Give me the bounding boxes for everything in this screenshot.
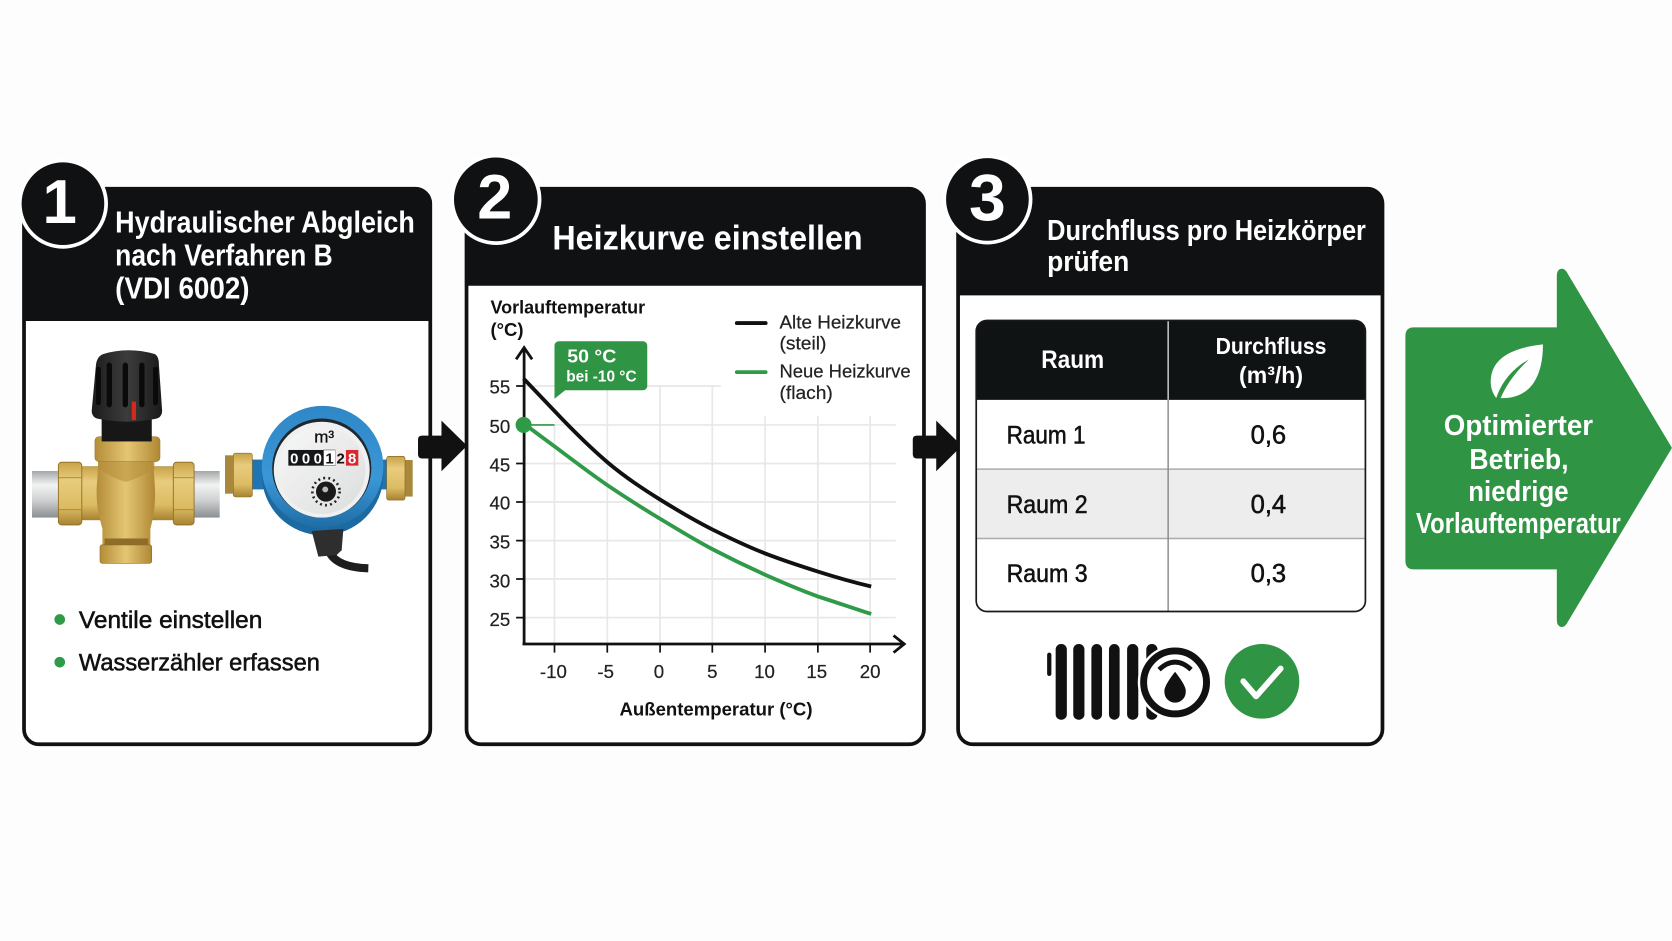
callout: 50 °C bei -10 °C xyxy=(554,341,647,399)
table: Durchfluss pro Raum: Raum xyxy=(1041,347,1104,374)
number badge 1: 1 xyxy=(43,168,77,237)
green arrow shape xyxy=(1405,269,1672,627)
chart legend: Neue Heizkurve xyxy=(779,360,911,381)
table: Durchfluss pro Raum: 0,3 xyxy=(1251,560,1286,588)
chart legend: (steil) xyxy=(779,333,826,354)
illustration: water meter: 0 xyxy=(314,450,322,467)
panel 1 heading: Hydraulischer Abgleich xyxy=(115,204,415,239)
illustration: water meter: m³ xyxy=(314,428,334,447)
panel 3 header bar xyxy=(956,189,1384,295)
illustration: water meter: 1 xyxy=(325,450,334,467)
illustration: water meter: 0 xyxy=(302,450,310,467)
table: Durchfluss pro Raum: Raum 1 xyxy=(1007,423,1086,450)
arrow: step 1 to 2 xyxy=(418,421,467,471)
marker: 50 °C point xyxy=(516,417,554,433)
illustration: water meter: 0 xyxy=(290,450,298,467)
table: Durchfluss pro Raum: 0,6 xyxy=(1251,422,1286,450)
chart axes xyxy=(516,348,904,653)
icon: radiator with flow gauge xyxy=(1047,644,1212,720)
x axis labels: -5 xyxy=(597,661,614,682)
panel 3 frame xyxy=(958,189,1382,744)
result arrow: optimierter Betrieb xyxy=(1405,269,1672,627)
chart legend: Alte Heizkurve xyxy=(779,311,901,332)
number badge 2 xyxy=(452,156,540,243)
x axis labels xyxy=(540,661,881,682)
chart legend: (flach) xyxy=(779,382,833,403)
y axis labels: 50 xyxy=(489,416,510,437)
panel 2 header bar xyxy=(465,189,926,286)
table: Durchfluss pro Raum: Durchfluss xyxy=(1216,333,1326,359)
number badge 3 xyxy=(944,156,1031,243)
x axis labels: 20 xyxy=(860,661,881,682)
x axis labels: -10 xyxy=(540,661,567,682)
panel 3: Durchfluss xyxy=(944,156,1384,744)
panel 2 frame xyxy=(467,189,924,744)
callout: 50 °C bei -10 °C: 50 °C xyxy=(567,346,616,367)
panel 1 heading: (VDI 6002) xyxy=(115,271,250,306)
result text: Betrieb, xyxy=(1469,444,1569,476)
illustration: thermostatic valve xyxy=(32,350,220,563)
bullet list: Wasserzähler erfassen xyxy=(79,650,320,677)
number badge 2: 2 xyxy=(477,163,512,233)
y axis labels: 45 xyxy=(489,454,510,475)
bullet list xyxy=(54,607,320,677)
panel 1 frame xyxy=(24,189,430,744)
illustration: water meter: 2 xyxy=(337,450,345,467)
curve: alte Heizkurve xyxy=(524,379,871,586)
callout: 50 °C bei -10 °C: bei -10 °C xyxy=(566,369,637,386)
x axis labels: 5 xyxy=(707,661,718,682)
number badge 1 xyxy=(20,160,106,247)
y axis labels: 25 xyxy=(489,609,510,630)
illustration: water meter xyxy=(225,406,413,568)
panel 3 heading: prüfen xyxy=(1047,246,1129,278)
result text: Vorlauftemperatur xyxy=(1416,508,1621,540)
y axis title: (°C) xyxy=(491,320,524,340)
number badge 3: 3 xyxy=(969,162,1006,236)
x axis labels: 15 xyxy=(806,661,827,682)
y axis labels: 40 xyxy=(489,493,510,514)
x axis labels: 10 xyxy=(754,661,775,682)
y axis labels xyxy=(489,376,510,630)
panel 3 heading: Durchfluss pro Heizkörper xyxy=(1047,215,1366,247)
table: Durchfluss pro Raum: (m³/h) xyxy=(1239,362,1303,388)
panel 2 heading: Heizkurve einstellen xyxy=(552,220,863,258)
line chart: Heizkurven xyxy=(489,297,911,719)
panel 2: Heizkurve xyxy=(452,156,926,744)
panel 1 heading: nach Verfahren B xyxy=(115,238,333,273)
x axis labels: 0 xyxy=(654,661,664,682)
arrow: step 2 to 3 xyxy=(913,421,962,471)
bullet list: Ventile einstellen xyxy=(79,607,262,634)
y axis labels: 30 xyxy=(489,571,510,592)
y axis labels: 35 xyxy=(489,532,510,553)
table: Durchfluss pro Raum: Raum 2 xyxy=(1007,492,1088,519)
y axis title: Vorlauftemperatur xyxy=(491,297,645,317)
chart legend xyxy=(737,311,911,403)
icon: green check mark xyxy=(1225,644,1299,719)
icon: leaf xyxy=(1491,344,1543,399)
panel 1: hydraulischer Abgleich xyxy=(20,160,432,744)
y axis labels: 55 xyxy=(489,376,510,397)
illustration: water meter: 8 xyxy=(348,450,356,467)
table: Durchfluss pro Raum xyxy=(976,320,1366,612)
curve: neue Heizkurve xyxy=(524,423,871,614)
table: Durchfluss pro Raum: Raum 3 xyxy=(1007,561,1088,588)
result text: Optimierter xyxy=(1444,410,1593,442)
table: Durchfluss pro Raum: 0,4 xyxy=(1251,491,1286,519)
table row shading xyxy=(977,469,1365,538)
table header xyxy=(976,320,1366,400)
result text: niedrige xyxy=(1468,476,1569,508)
x axis title: Außentemperatur (°C) xyxy=(620,699,813,719)
panel 1 header bar xyxy=(22,189,432,321)
